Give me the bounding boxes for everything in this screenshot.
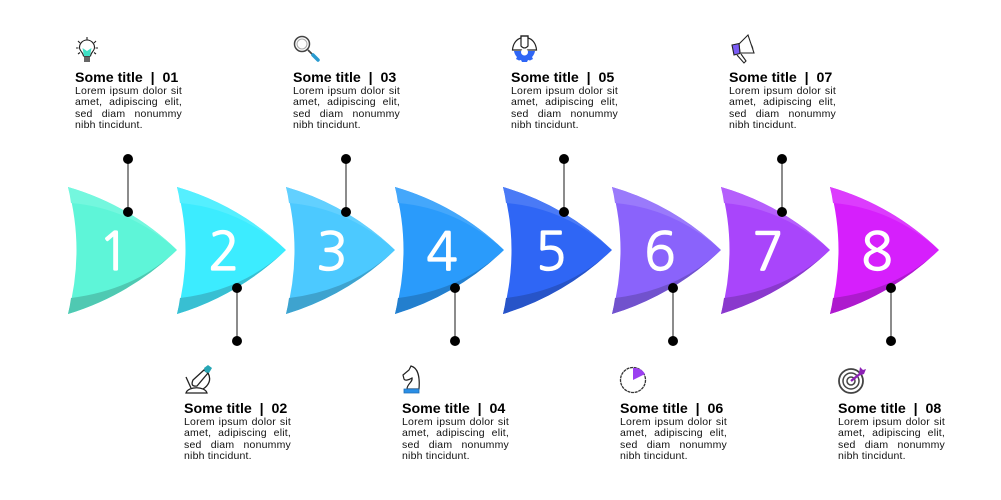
icon: chess knight [403,366,419,393]
text block 2: Some title | 02 [184,401,287,417]
icon: pie clock [620,368,646,392]
arrow 4 [395,187,504,314]
arrow 5: 5 [535,226,567,278]
text block 2: nibh tincidunt. [184,450,252,462]
text block 1 [75,70,182,131]
connector 7 [777,154,787,217]
icon: megaphone [732,35,754,63]
text block 2: amet, adipiscing elit, [184,427,291,439]
text block 2: Lorem ipsum dolor sit [184,416,291,428]
text block 3 [293,70,400,131]
connector 1 [123,154,133,217]
text block 6: nibh tincidunt. [620,450,688,462]
arrow 3: 3 [316,226,348,278]
text block 1: Some title | 01 [75,70,178,86]
text block 1: nibh tincidunt. [75,119,143,131]
text block 3: Some title | 03 [293,70,396,86]
arrow 2: 2 [208,226,240,278]
text block 4: Lorem ipsum dolor sit [402,416,509,428]
text block 6: amet, adipiscing elit, [620,427,727,439]
text block 3: sed diam nonummy [293,108,400,120]
text block 1: Lorem ipsum dolor sit [75,85,182,97]
text block 4 [402,401,509,462]
arrow 8: 8 [861,226,893,278]
text block 3: nibh tincidunt. [293,119,361,131]
text block 6 [620,401,727,462]
arrow 1: 1 [98,226,130,278]
icon: magnifying glass [294,36,318,60]
text block 5: nibh tincidunt. [511,119,579,131]
text block 1: amet, adipiscing elit, [75,96,182,108]
text block 7: Some title | 07 [729,70,832,86]
text block 5: Some title | 05 [511,70,614,86]
arrow 8 [830,187,939,314]
text block 4: amet, adipiscing elit, [402,427,509,439]
arrow 4: 4 [426,226,458,278]
text block 5: amet, adipiscing elit, [511,96,618,108]
text block 2: sed diam nonummy [184,439,291,451]
text block 6: sed diam nonummy [620,439,727,451]
text block 8: amet, adipiscing elit, [838,427,945,439]
text block 7 [729,70,836,131]
icon: microscope [186,365,212,393]
text block 6: Lorem ipsum dolor sit [620,416,727,428]
icon: light bulb [76,37,98,62]
arrow 6 [612,187,721,314]
arrow 7: 7 [752,226,784,278]
text block 5 [511,70,618,131]
text block 7: nibh tincidunt. [729,119,797,131]
connector 5 [559,154,569,217]
text block 7: Lorem ipsum dolor sit [729,85,836,97]
text block 8: nibh tincidunt. [838,450,906,462]
text block 3: Lorem ipsum dolor sit [293,85,400,97]
text block 6: Some title | 06 [620,401,723,417]
text block 4: sed diam nonummy [402,439,509,451]
text block 8: sed diam nonummy [838,439,945,451]
icon: target with dart [839,367,866,393]
text block 8 [838,401,945,462]
arrow 7 [721,187,830,314]
text block 4: nibh tincidunt. [402,450,470,462]
text block 3: amet, adipiscing elit, [293,96,400,108]
text block 8: Some title | 08 [838,401,941,417]
connector 4 [450,283,460,346]
text block 8: Lorem ipsum dolor sit [838,416,945,428]
connector 3 [341,154,351,217]
connector 2 [232,283,242,346]
arrow 5 [503,187,612,314]
text block 7: sed diam nonummy [729,108,836,120]
text block 2 [184,401,291,462]
connector 6 [668,283,678,346]
icon: hard hat and gear [512,36,536,62]
text block 4: Some title | 04 [402,401,505,417]
text block 1: sed diam nonummy [75,108,182,120]
arrow 6: 6 [644,226,676,278]
arrow 2 [177,187,286,314]
arrow 1 [68,187,177,314]
text block 5: sed diam nonummy [511,108,618,120]
text block 5: Lorem ipsum dolor sit [511,85,618,97]
arrow 3 [286,187,395,314]
connector 8 [886,283,896,346]
text block 7: amet, adipiscing elit, [729,96,836,108]
